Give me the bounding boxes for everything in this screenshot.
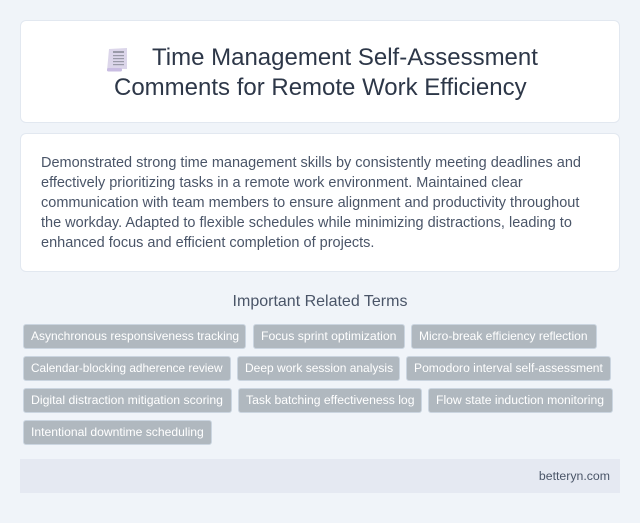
- title: [114, 44, 538, 101]
- tag: Intentional downtime scheduling: [31, 425, 204, 439]
- tag: Pomodoro interval self-assessment: [414, 361, 603, 375]
- footer source: betteryn.com: [539, 469, 610, 483]
- tag: [253, 324, 405, 349]
- tag: Micro-break efficiency reflection: [419, 329, 588, 343]
- tag: Deep work session analysis: [245, 361, 393, 375]
- panel: description: [20, 133, 620, 272]
- title: Comments for Remote Work Efficiency: [114, 74, 527, 101]
- tag: [406, 356, 611, 381]
- description text: effectively prioritizing tasks in a remote work environment. Maintained clear: [41, 175, 523, 191]
- tag: Asynchronous responsiveness tracking: [31, 329, 239, 343]
- description text: communication with team members to ensure alignment and productivity throughout: [41, 195, 579, 211]
- tag: [23, 388, 232, 413]
- tag list: [23, 324, 613, 445]
- heading: related terms: Important Related Terms: [233, 293, 407, 310]
- description text: Demonstrated strong time management skills by consistently meeting deadlines and: [41, 155, 581, 171]
- footer bar: [20, 459, 620, 493]
- description text: enhanced focus and efficient completion of projects.: [41, 235, 374, 251]
- title: Time Management Self-Assessment: [152, 44, 538, 71]
- tag: [411, 324, 597, 349]
- tag: Task batching effectiveness log: [246, 393, 414, 407]
- panel: title card: [20, 20, 620, 123]
- icon: document receipt: [107, 48, 127, 72]
- description text: [41, 155, 581, 251]
- description text: the workday. Adapted to flexible schedules while minimizing distractions, leading to: [41, 215, 572, 231]
- tag: Calendar-blocking adherence review: [31, 361, 222, 375]
- tag: [23, 356, 231, 381]
- tag: [237, 356, 400, 381]
- tag: [23, 420, 212, 445]
- tag: [23, 324, 246, 349]
- tag: [238, 388, 422, 413]
- tag: [428, 388, 613, 413]
- tag: Flow state induction monitoring: [436, 393, 604, 407]
- tag: Focus sprint optimization: [261, 329, 396, 343]
- tag: Digital distraction mitigation scoring: [31, 393, 223, 407]
